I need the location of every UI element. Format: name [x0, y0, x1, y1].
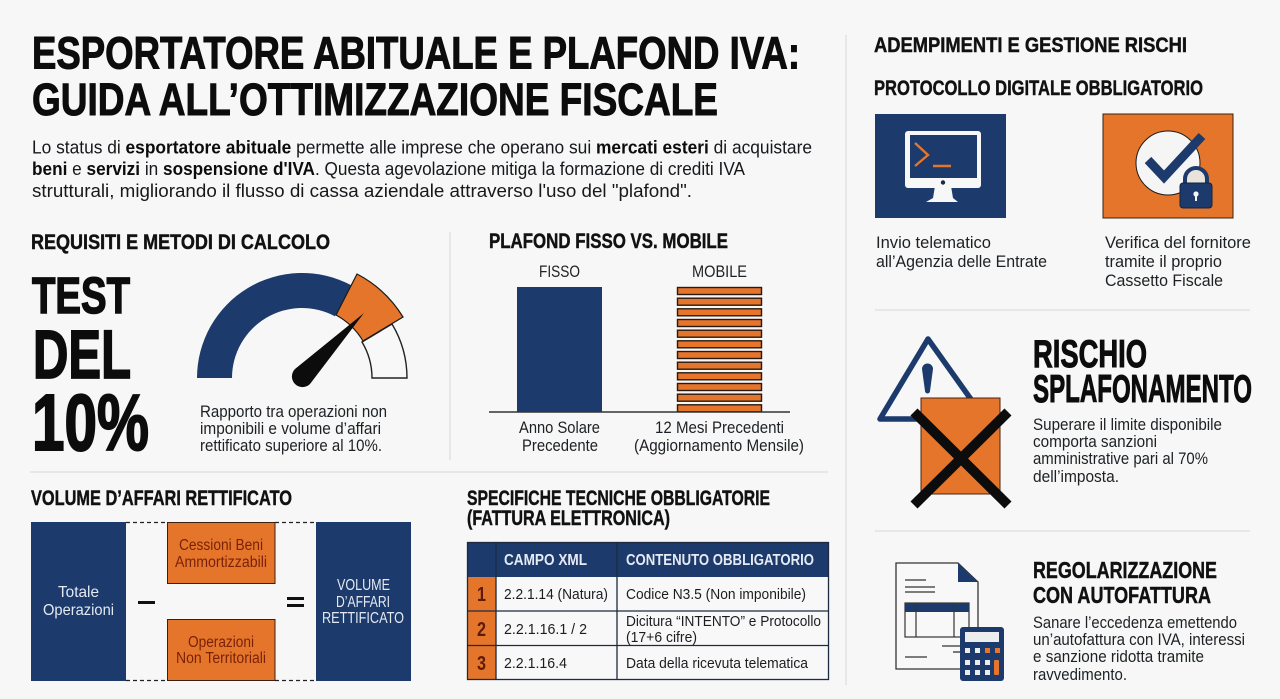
- heading: requisiti: REQUISITI E METODI DI CALCOLO: [31, 231, 330, 254]
- icon: invoice and calculator: [896, 563, 1004, 681]
- big stat: test del 10%: [32, 267, 149, 467]
- icon: computer terminal: [875, 114, 1006, 218]
- bar chart: fisso vs mobile: FISSO: [539, 263, 580, 281]
- box: volume d'affari rettificato: D’AFFARI: [336, 594, 390, 611]
- bar chart: fisso vs mobile: 12 Mesi Precedenti: [655, 419, 784, 437]
- big stat: test del 10%: DEL: [33, 316, 131, 393]
- row 2: 2: [477, 619, 486, 641]
- box: operazioni non territoriali: Operazioni: [188, 634, 254, 651]
- box: totale operazioni: [31, 522, 126, 681]
- box: cessioni beni: Ammortizzabili: [175, 554, 267, 571]
- big stat: test del 10%: TEST: [32, 267, 130, 324]
- title: GUIDA ALL’OTTIMIZZAZIONE FISCALE: [32, 74, 718, 125]
- intro text: Lo status di esportatore abituale permette alle imprese che operano sui mercati esteri di acquistare: [32, 138, 812, 158]
- intro text: beni e servizi in sospensione d'IVA. Questa agevolazione mitiga la formazione di crediti IVA: [32, 159, 745, 179]
- box: cessioni beni: [168, 522, 275, 584]
- text: rischio: amministrative pari al 70%: [1033, 450, 1208, 468]
- text: regolarizzazione: un’autofattura con IVA, interessi: [1033, 631, 1245, 649]
- box: operazioni non territoriali: Non Territoriali: [176, 650, 266, 667]
- caption: invio telematico: [876, 234, 1047, 271]
- equals sign: [287, 597, 304, 607]
- heading: adempimenti: ADEMPIMENTI E GESTIONE RISCHI: [874, 34, 1187, 57]
- panel: requisiti e metodi di calcolo: [31, 231, 407, 467]
- row 2: 2.2.1.16.1 / 2: [504, 621, 587, 638]
- row 1: [477, 584, 806, 606]
- caption: verifica del fornitore: Cassetto Fiscale: [1105, 272, 1223, 290]
- heading: specifiche: [467, 487, 770, 530]
- panel: specifiche tecniche: [467, 487, 829, 680]
- bar chart: fisso vs mobile: (Aggiornamento Mensile): [634, 437, 804, 455]
- heading: plafond: PLAFOND FISSO VS. MOBILE: [489, 230, 728, 253]
- bar chart: fisso vs mobile: MOBILE: [692, 263, 747, 281]
- gauge description: rettificato superiore al 10%.: [200, 437, 382, 455]
- formula diagram: [31, 522, 411, 681]
- caption: invio telematico: Invio telematico: [876, 234, 991, 252]
- text: regolarizzazione: [1033, 614, 1245, 684]
- box: volume d'affari rettificato: [316, 522, 411, 681]
- table header: CAMPO XML: [504, 552, 587, 569]
- row 1: 1: [477, 584, 486, 606]
- row 2: (17+6 cifre): [626, 629, 697, 646]
- heading: regolarizzazione: [1033, 557, 1217, 608]
- table header: [467, 542, 829, 577]
- text: regolarizzazione: e sanzione ridotta tramite: [1033, 648, 1204, 666]
- text: rischio: comporta sanzioni: [1033, 433, 1157, 451]
- panel: regolarizzazione: [896, 557, 1245, 684]
- table: [467, 542, 829, 680]
- row 3: 2.2.1.16.4: [504, 655, 567, 672]
- row 3: [477, 653, 809, 675]
- text: rischio: Superare il limite disponibile: [1033, 416, 1222, 434]
- heading: specifiche: (FATTURA ELETTRONICA): [467, 507, 670, 530]
- gauge description: [200, 403, 387, 455]
- heading: protocollo digitale: PROTOCOLLO DIGITALE OBBLIGATORIO: [874, 77, 1203, 100]
- box: volume d'affari rettificato: RETTIFICATO: [322, 610, 404, 627]
- gauge description: Rapporto tra operazioni non: [200, 403, 387, 421]
- row 1: Codice N3.5 (Non imponibile): [626, 586, 806, 603]
- heading: specifiche: SPECIFICHE TECNICHE OBBLIGATORIE: [467, 487, 770, 510]
- heading: rischio splafonamento: RISCHIO: [1033, 333, 1147, 376]
- row 1: 2.2.1.14 (Natura): [504, 586, 608, 603]
- heading: regolarizzazione: CON AUTOFATTURA: [1033, 582, 1211, 608]
- intro text: [32, 138, 812, 201]
- panel: adempimenti: [874, 34, 1251, 290]
- heading: regolarizzazione: REGOLARIZZAZIONE: [1033, 557, 1217, 583]
- title: [32, 28, 800, 125]
- box: volume d'affari rettificato: VOLUME: [337, 577, 390, 594]
- bar chart: fisso vs mobile: Precedente: [522, 437, 598, 455]
- box: operazioni non territoriali: [168, 620, 275, 680]
- big stat: test del 10%: 10%: [32, 378, 149, 467]
- caption: verifica del fornitore: Verifica del fornitore: [1105, 234, 1251, 252]
- panel: volume d'affari rettificato: [31, 487, 411, 681]
- caption: verifica del fornitore: tramite il proprio: [1105, 253, 1222, 271]
- caption: verifica del fornitore: [1105, 234, 1251, 290]
- panel: plafond fisso vs mobile: [489, 230, 804, 455]
- table header: CONTENUTO OBBLIGATORIO: [626, 552, 814, 569]
- text: rischio: [1033, 416, 1222, 486]
- text: regolarizzazione: Sanare l’eccedenza emettendo: [1033, 614, 1237, 632]
- text: regolarizzazione: ravvedimento.: [1033, 666, 1127, 684]
- minus sign: [138, 601, 155, 604]
- row 3: Data della ricevuta telematica: [626, 655, 809, 672]
- box: totale operazioni: Totale: [58, 584, 99, 601]
- title: ESPORTATORE ABITUALE E PLAFOND IVA:: [32, 28, 800, 78]
- gauge chart: [197, 273, 407, 387]
- row 2: [477, 613, 821, 646]
- row 2: Dicitura “INTENTO” e Protocollo: [626, 613, 821, 630]
- intro text: strutturali, migliorando il flusso di cassa aziendale attraverso l'uso del "plafond".: [32, 181, 692, 201]
- icon: verified check with lock: [1103, 114, 1233, 218]
- panel: rischio splafonamento: [880, 333, 1252, 505]
- bar chart: fisso vs mobile: [489, 263, 804, 455]
- box: totale operazioni: Operazioni: [43, 602, 114, 619]
- box: cessioni beni: Cessioni Beni: [179, 537, 263, 554]
- heading: rischio splafonamento: [1033, 333, 1252, 411]
- bar chart: fisso vs mobile: Anno Solare: [519, 419, 600, 437]
- icon: warning with crossed box: [880, 339, 1008, 505]
- caption: invio telematico: all’Agenzia delle Entrate: [876, 253, 1047, 271]
- heading: volume: VOLUME D’AFFARI RETTIFICATO: [31, 487, 292, 510]
- text: rischio: dell’imposta.: [1033, 468, 1119, 486]
- row 3: 3: [477, 653, 486, 675]
- gauge description: imponibili e volume d’affari: [200, 420, 381, 438]
